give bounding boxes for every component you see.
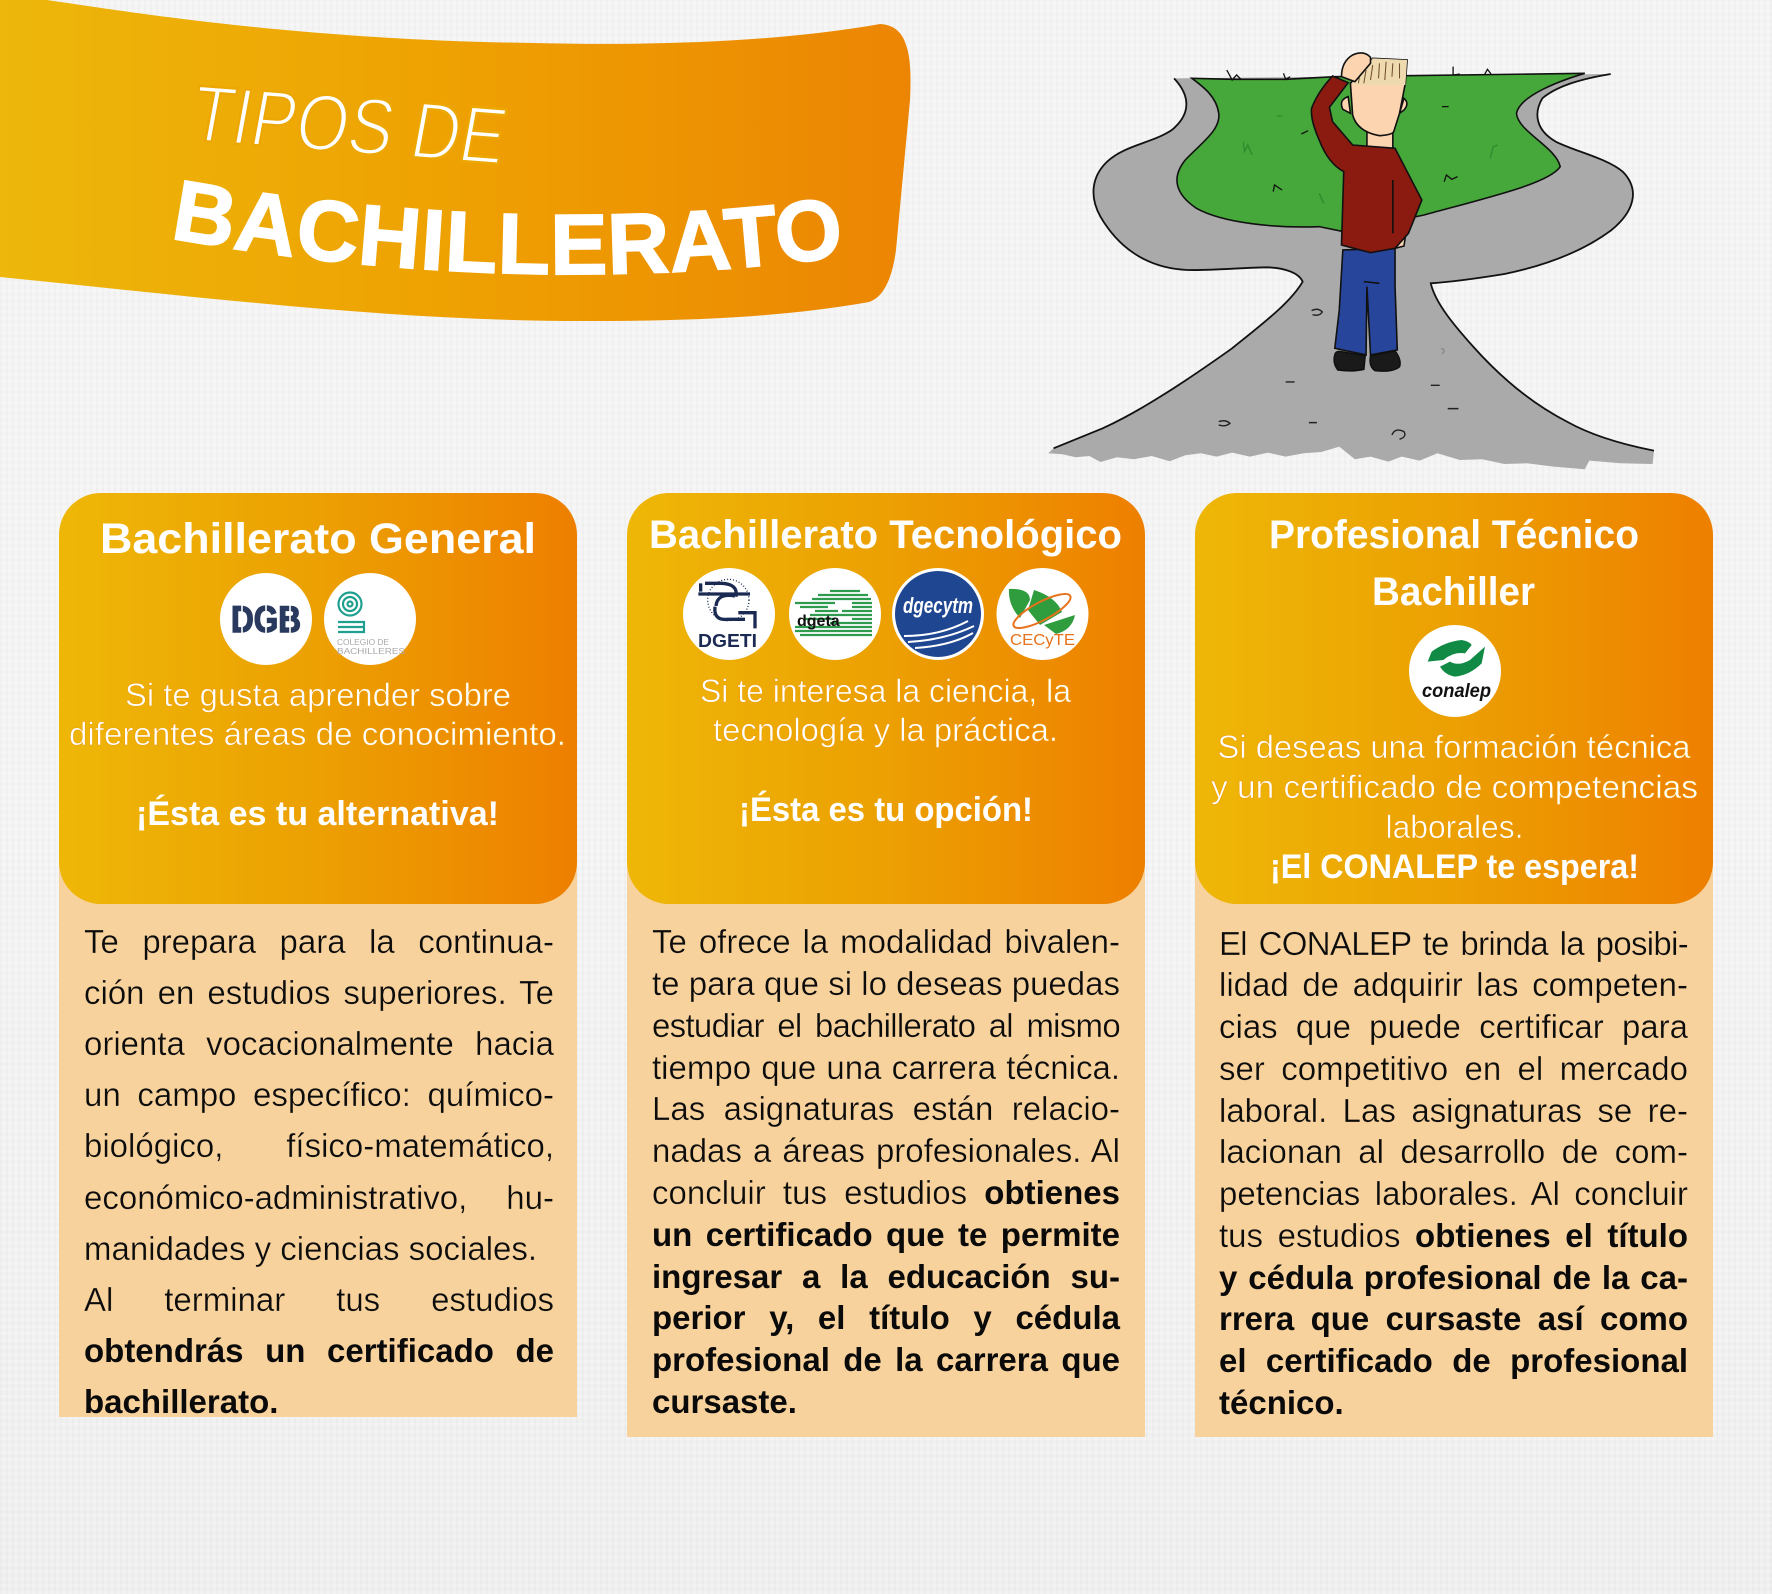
body text: tecnologico: un certificado que te permite bbox=[652, 1216, 1120, 1253]
pebbles bbox=[1219, 309, 1458, 439]
intro text: Si te gusta aprender sobre bbox=[125, 677, 511, 713]
illustration: man at a fork in the road bbox=[1048, 52, 1654, 470]
body text: tecnologico: Las asignaturas están relacio- bbox=[652, 1090, 1120, 1127]
body text: conalep: cias que puede certificar para bbox=[1219, 1008, 1688, 1045]
title banner bbox=[0, 0, 910, 321]
logo: dgecytm: dgecytm bbox=[903, 593, 973, 618]
logo: DGETI bbox=[683, 568, 775, 660]
body text: tecnologico: profesional de la carrera que bbox=[652, 1341, 1120, 1378]
call to action: ¡El CONALEP te espera! bbox=[1270, 848, 1639, 886]
neck bbox=[1367, 132, 1393, 148]
body text: general: Al terminar tus estudios bbox=[84, 1281, 554, 1318]
logo: dgecytm bbox=[892, 568, 984, 660]
call to action: ¡Ésta es tu alternativa! bbox=[136, 795, 499, 833]
body text: tecnologico: cursaste. bbox=[652, 1383, 797, 1420]
logo: Colegio de Bachilleres: BACHILLERES bbox=[337, 646, 405, 656]
logo: dgeta bbox=[789, 568, 881, 660]
logo: DGB bbox=[220, 573, 312, 665]
body text: conalep: lacionan al desarrollo de com- bbox=[1219, 1133, 1688, 1170]
title line 2: BACHILLERATO bbox=[174, 180, 839, 276]
logo: CECyTE: CECyTE bbox=[1010, 632, 1075, 649]
panel: Profesional Técnico Bachiller bbox=[1195, 493, 1713, 1437]
body text: general: manidades y ciencias sociales. bbox=[84, 1230, 537, 1267]
body text: conalep: laboral. Las asignaturas se re- bbox=[1219, 1092, 1688, 1129]
body text: general: obtendrás un certificado de bbox=[84, 1332, 554, 1369]
head bbox=[1350, 58, 1407, 136]
body text: conalep: lidad de adquirir las competen- bbox=[1219, 966, 1688, 1003]
call to action: ¡Ésta es tu opción! bbox=[739, 791, 1033, 829]
logo: Colegio de Bachilleres: COLEGIO DE bbox=[337, 637, 389, 647]
panel: Bachillerato General bbox=[59, 493, 577, 1420]
fist bbox=[1341, 53, 1371, 82]
body text: general: orienta vocacionalmente hacia bbox=[84, 1025, 554, 1062]
body text: general: bachillerato. bbox=[84, 1383, 278, 1420]
intro text: tecnología y la práctica. bbox=[713, 712, 1058, 748]
heading: Bachiller bbox=[1372, 570, 1535, 614]
body text: conalep: tus estudios obtienes el título bbox=[1219, 1217, 1688, 1254]
body text: tecnologico bbox=[652, 923, 1120, 1420]
logo: dgeta: dgeta bbox=[797, 613, 840, 630]
title line 1: TIPOS DE bbox=[185, 68, 514, 181]
body text: tecnologico: ingresar a la educación su- bbox=[652, 1258, 1120, 1295]
ears bbox=[1341, 97, 1407, 113]
panel body background bbox=[627, 693, 1145, 1437]
shirt bbox=[1311, 76, 1422, 253]
body text: general: un campo específico: químico- bbox=[84, 1076, 554, 1113]
body text: tecnologico: nadas a áreas profesionales. Al bbox=[652, 1132, 1120, 1169]
body text: conalep: El CONALEP te brinda la posibi- bbox=[1219, 925, 1688, 962]
body text: tecnologico: tiempo que una carrera técnica. bbox=[652, 1049, 1120, 1086]
body text: tecnologico: concluir tus estudios obtienes bbox=[652, 1174, 1120, 1211]
logo: DGETI: DGETI bbox=[698, 631, 757, 651]
man bbox=[1311, 53, 1422, 371]
body text: general: Te prepara para la continua- bbox=[84, 923, 554, 960]
intro text: laborales. bbox=[1386, 809, 1524, 845]
heading: Bachillerato General bbox=[100, 515, 536, 563]
logo: CECyTE bbox=[996, 568, 1088, 660]
intro text: Si te interesa la ciencia, la bbox=[700, 673, 1071, 709]
header: Bachillerato General bbox=[59, 493, 577, 904]
body text: conalep: ser competitivo en el mercado bbox=[1219, 1050, 1688, 1087]
body text: tecnologico: te para que si lo deseas puedas bbox=[652, 965, 1120, 1002]
intro text bbox=[1211, 729, 1698, 845]
hip hand bbox=[1394, 234, 1405, 249]
body text: general: ción en estudios superiores. Te bbox=[84, 974, 554, 1011]
logo: Colegio de Bachilleres bbox=[324, 573, 416, 665]
intro text: diferentes áreas de conocimiento. bbox=[69, 716, 566, 752]
shoes bbox=[1334, 351, 1400, 371]
heading: Bachillerato Tecnológico bbox=[649, 513, 1122, 557]
hair bbox=[1351, 58, 1407, 85]
intro text bbox=[700, 673, 1071, 748]
jeans bbox=[1335, 248, 1397, 355]
panel body background bbox=[1195, 693, 1713, 1437]
logo: conalep bbox=[1409, 625, 1501, 717]
road bbox=[1048, 74, 1654, 469]
body text: general bbox=[84, 923, 554, 1420]
logo: DGB: DGB bbox=[231, 599, 301, 640]
heading: Profesional Técnico bbox=[1269, 513, 1639, 557]
intro text: Si deseas una formación técnica bbox=[1218, 729, 1691, 765]
body text: general: económico-administrativo, hu- bbox=[84, 1179, 554, 1216]
body text: conalep: el certificado de profesional bbox=[1219, 1342, 1688, 1379]
panel: Bachillerato Tecnológico bbox=[627, 493, 1145, 1437]
intro text bbox=[69, 677, 566, 752]
body text: conalep bbox=[1219, 925, 1688, 1421]
body text: tecnologico: estudiar el bachillerato al mismo bbox=[652, 1007, 1120, 1044]
body text: conalep: y cédula profesional de la ca- bbox=[1219, 1259, 1688, 1296]
intro text: y un certificado de competencias bbox=[1211, 769, 1698, 805]
body text: tecnologico: Te ofrece la modalidad bivalen- bbox=[652, 923, 1120, 960]
body text: tecnologico: perior y, el título y cédula bbox=[652, 1299, 1120, 1336]
body text: general: biológico, físico-matemático, bbox=[84, 1127, 554, 1164]
heading bbox=[1269, 513, 1639, 614]
header: Bachillerato Tecnológico bbox=[627, 493, 1145, 904]
body text: conalep: petencias laborales. Al concluir bbox=[1219, 1175, 1688, 1212]
logo: conalep: conalep bbox=[1422, 681, 1491, 702]
body text: conalep: rrera que cursaste así como bbox=[1219, 1300, 1688, 1337]
panel body background bbox=[59, 693, 577, 1417]
header: Profesional Técnico Bachiller bbox=[1195, 493, 1713, 904]
body text: conalep: técnico. bbox=[1219, 1384, 1344, 1421]
grass bbox=[1177, 67, 1585, 232]
